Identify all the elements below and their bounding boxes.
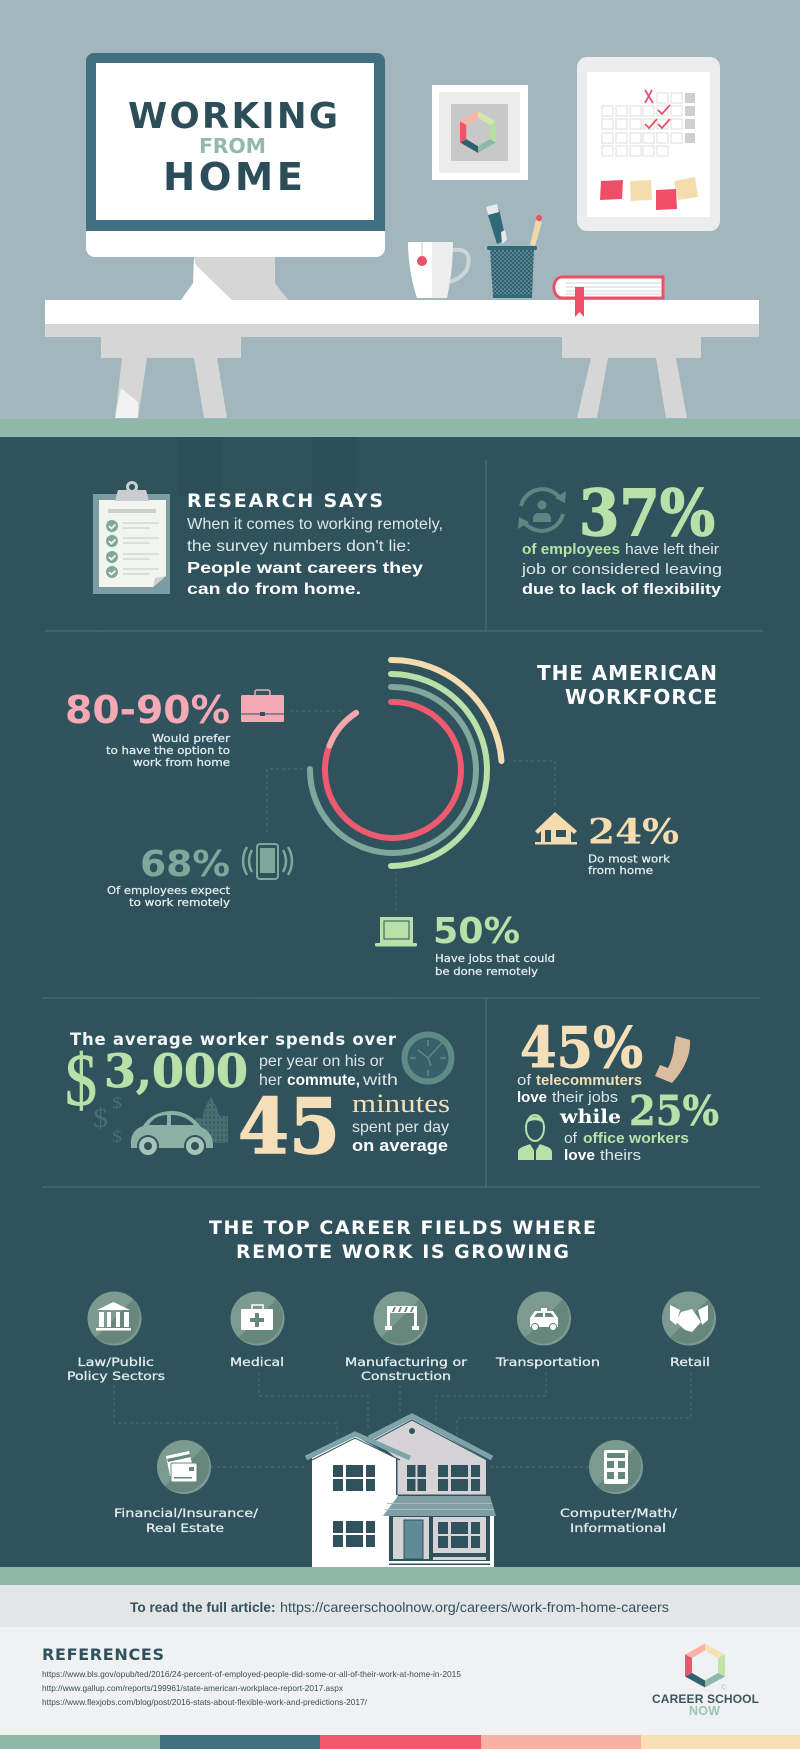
- commute heading: The average worker spends over: [70, 1030, 397, 1049]
- description: to have the option to: [106, 745, 230, 757]
- label: Retail: [670, 1355, 710, 1369]
- while label: while: [559, 1106, 621, 1128]
- label: Transportation: [495, 1355, 600, 1369]
- logo: career school now: ©: [721, 1683, 727, 1692]
- panel: top career fields: [67, 1217, 716, 1567]
- picture frame with logo: [432, 85, 528, 180]
- connector lines: [267, 711, 555, 911]
- icon: phone: [243, 844, 292, 879]
- book ribbon: [575, 287, 584, 317]
- decorative money and city: [93, 1093, 228, 1146]
- panel: commute: [65, 1030, 452, 1171]
- title: FROM: [199, 134, 266, 158]
- connector lines: [114, 1372, 691, 1467]
- mug: [408, 242, 469, 298]
- commute text: per year on his or: [259, 1053, 384, 1070]
- field: computer and math: [560, 1440, 677, 1535]
- label: Informational: [570, 1521, 666, 1535]
- reference links: https://www.flexjobs.com/blog/post/2016-stats-about-flexible-work-and-predictions-2017/: [42, 1697, 368, 1707]
- icon: calculator: [604, 1450, 628, 1484]
- description: to work remotely: [129, 897, 230, 909]
- icon: dollar sign: $: [65, 1040, 97, 1122]
- heading: references: REFERENCES: [42, 1645, 164, 1664]
- wall calendar tablet: [577, 57, 720, 231]
- label: [67, 1355, 165, 1383]
- description: [435, 953, 555, 978]
- article link bar: To read the full article:: [130, 1599, 276, 1615]
- description: Do most work: [588, 854, 671, 866]
- description: be done remotely: [435, 966, 538, 978]
- research text: People want careers they: [187, 560, 423, 577]
- label: Computer/Math/: [560, 1506, 677, 1520]
- icon: house: [535, 812, 577, 844]
- icon: clipboard: [93, 482, 170, 594]
- description: [107, 885, 230, 909]
- description: work from home: [133, 757, 230, 769]
- dividers: [42, 460, 763, 1187]
- office worker text: of: [564, 1130, 578, 1147]
- research text: the survey numbers don't lie:: [187, 538, 411, 555]
- field: medical: [230, 1292, 284, 1369]
- telecommuter text: love: [517, 1089, 547, 1106]
- research text: When it comes to working remotely,: [187, 516, 443, 533]
- reference links: http://www.gallup.com/reports/199961/state-american-workplace-report-2017.aspx: [42, 1683, 344, 1693]
- field: manufacturing or construction: [345, 1292, 467, 1383]
- logo: career school now: [652, 1644, 759, 1718]
- title: WORKING: [128, 96, 338, 137]
- panel: telecommuters: [517, 1015, 719, 1164]
- label: Law/Public: [78, 1355, 154, 1369]
- heading: research says: RESEARCH SAYS: [187, 490, 383, 512]
- minutes text: [352, 1089, 450, 1155]
- reference links: https://www.bls.gov/opub/ted/2016/24-percent-of-employed-people-did-some-or-all-of-their-work-at-home-in-2015: [42, 1669, 461, 1679]
- article link bar: https://careerschoolnow.org/careers/work-from-home-careers: [280, 1599, 669, 1615]
- label: Policy Sectors: [67, 1369, 165, 1383]
- field: law and public policy: [67, 1292, 165, 1383]
- logo: career school now: CAREER SCHOOL: [652, 1692, 759, 1706]
- commute text: commute,: [287, 1072, 360, 1089]
- wall background: [0, 0, 800, 419]
- minutes text: minutes: [352, 1089, 450, 1118]
- description: [106, 733, 231, 769]
- description: Of employees expect: [107, 885, 230, 897]
- label: Construction: [361, 1369, 451, 1383]
- minutes text: spent per day: [352, 1119, 449, 1136]
- icon: barrier: [385, 1306, 419, 1330]
- stat: 80-90%: 80-90%: [65, 688, 230, 732]
- stat: 68%: [107, 844, 292, 909]
- icon: handshake: [670, 1305, 708, 1332]
- heading: top career fields: [209, 1217, 596, 1263]
- office worker text: theirs: [600, 1147, 641, 1164]
- illustration: house: [306, 1416, 496, 1567]
- icon: courthouse: [96, 1302, 131, 1330]
- office worker text: love: [564, 1147, 595, 1164]
- description: [588, 854, 671, 877]
- field: retail: [662, 1292, 716, 1369]
- decorative money and city: $: [112, 1093, 122, 1112]
- monitor stand: [181, 257, 288, 300]
- heading: top career fields: REMOTE WORK IS GROWING: [236, 1241, 569, 1263]
- label: [345, 1355, 467, 1383]
- reference links: [42, 1669, 461, 1707]
- label: [114, 1506, 258, 1535]
- stat: 24%: [535, 812, 679, 877]
- stat: 24%: 24%: [588, 812, 679, 853]
- panel: research says: [93, 482, 443, 598]
- title: HOME: [163, 155, 303, 200]
- telecommuter text: of: [517, 1072, 532, 1089]
- icon: telephone handset: [655, 1036, 690, 1083]
- background hexagon pattern: [0, 437, 400, 1000]
- radial chart: [310, 660, 502, 866]
- stat: 50%: 50%: [433, 911, 520, 952]
- decorative money and city: $: [112, 1127, 122, 1146]
- icon: medical kit: [241, 1305, 273, 1330]
- heading: the american workforce: [537, 661, 717, 709]
- icon: briefcase: [241, 690, 284, 722]
- research text: can do from home.: [187, 581, 361, 598]
- stat text: job or considered leaving: [521, 561, 722, 578]
- stat: 45%: 45%: [520, 1015, 643, 1081]
- stat: 68%: 68%: [140, 844, 230, 885]
- stat text: due to lack of flexibility: [522, 581, 722, 598]
- stat: 37%: 37%: [579, 476, 715, 551]
- telecommuter text: [517, 1072, 642, 1106]
- commute text: [259, 1053, 398, 1089]
- telecommuter text: telecommuters: [536, 1072, 642, 1089]
- icon: turnover cycle: [518, 489, 566, 531]
- sticky notes: [600, 177, 698, 210]
- dark main background: [0, 437, 800, 1567]
- bottom colour bar: [0, 1735, 800, 1749]
- label: Real Estate: [146, 1521, 224, 1535]
- calendar grid: [602, 93, 695, 156]
- logo: career school now: NOW: [689, 1704, 720, 1718]
- description: Have jobs that could: [435, 953, 555, 965]
- icon: office worker: [518, 1115, 552, 1160]
- book: [554, 277, 663, 298]
- icon: taxi: [530, 1308, 558, 1330]
- field: financial: [114, 1440, 258, 1535]
- description: Would prefer: [152, 733, 231, 745]
- office worker text: office workers: [583, 1130, 689, 1147]
- telecommuter text: their jobs: [552, 1089, 618, 1106]
- icon: car: [131, 1111, 213, 1157]
- article link bar: [0, 1585, 800, 1627]
- stat: 80-90%: [65, 688, 284, 769]
- commute text: with: [362, 1072, 398, 1089]
- heading: the american workforce: THE AMERICAN: [537, 661, 717, 685]
- title: [128, 96, 338, 200]
- decorative money and city: $: [93, 1103, 108, 1133]
- heading: the american workforce: WORKFORCE: [565, 685, 717, 709]
- references panel: [0, 1627, 800, 1735]
- pen and pencil in cup: [486, 204, 542, 298]
- field: transportation: [495, 1292, 600, 1369]
- label: Financial/Insurance/: [114, 1506, 258, 1520]
- icon: clock: [404, 1034, 452, 1082]
- stat text: of employees: [522, 541, 620, 558]
- label: Medical: [230, 1355, 284, 1369]
- heading: top career fields: THE TOP CAREER FIELDS WHERE: [209, 1217, 596, 1239]
- commute text: her: [259, 1072, 282, 1089]
- panel: the american workforce: [65, 660, 717, 978]
- icon: credit cards: [166, 1451, 197, 1482]
- office worker text: [564, 1130, 689, 1164]
- desk: [45, 300, 759, 418]
- minutes text: on average: [352, 1137, 448, 1155]
- stat: 45 minutes: 45: [238, 1082, 340, 1171]
- description: from home: [588, 865, 653, 877]
- calendar marks: [645, 90, 670, 128]
- panel: 37 percent: [518, 476, 722, 598]
- floor band: [0, 419, 800, 437]
- stat text: [521, 541, 722, 598]
- stat text: have left their: [625, 541, 719, 558]
- research text: [187, 516, 443, 598]
- footer band: green: [0, 1567, 800, 1585]
- stat: $3,000: 3,000: [104, 1044, 248, 1098]
- label: Manufacturing or: [345, 1355, 467, 1369]
- stat: 25%: 25%: [629, 1087, 719, 1135]
- icon: laptop: [375, 918, 417, 946]
- label: [560, 1506, 677, 1535]
- stat: 50%: [375, 911, 555, 978]
- monitor: [86, 53, 385, 300]
